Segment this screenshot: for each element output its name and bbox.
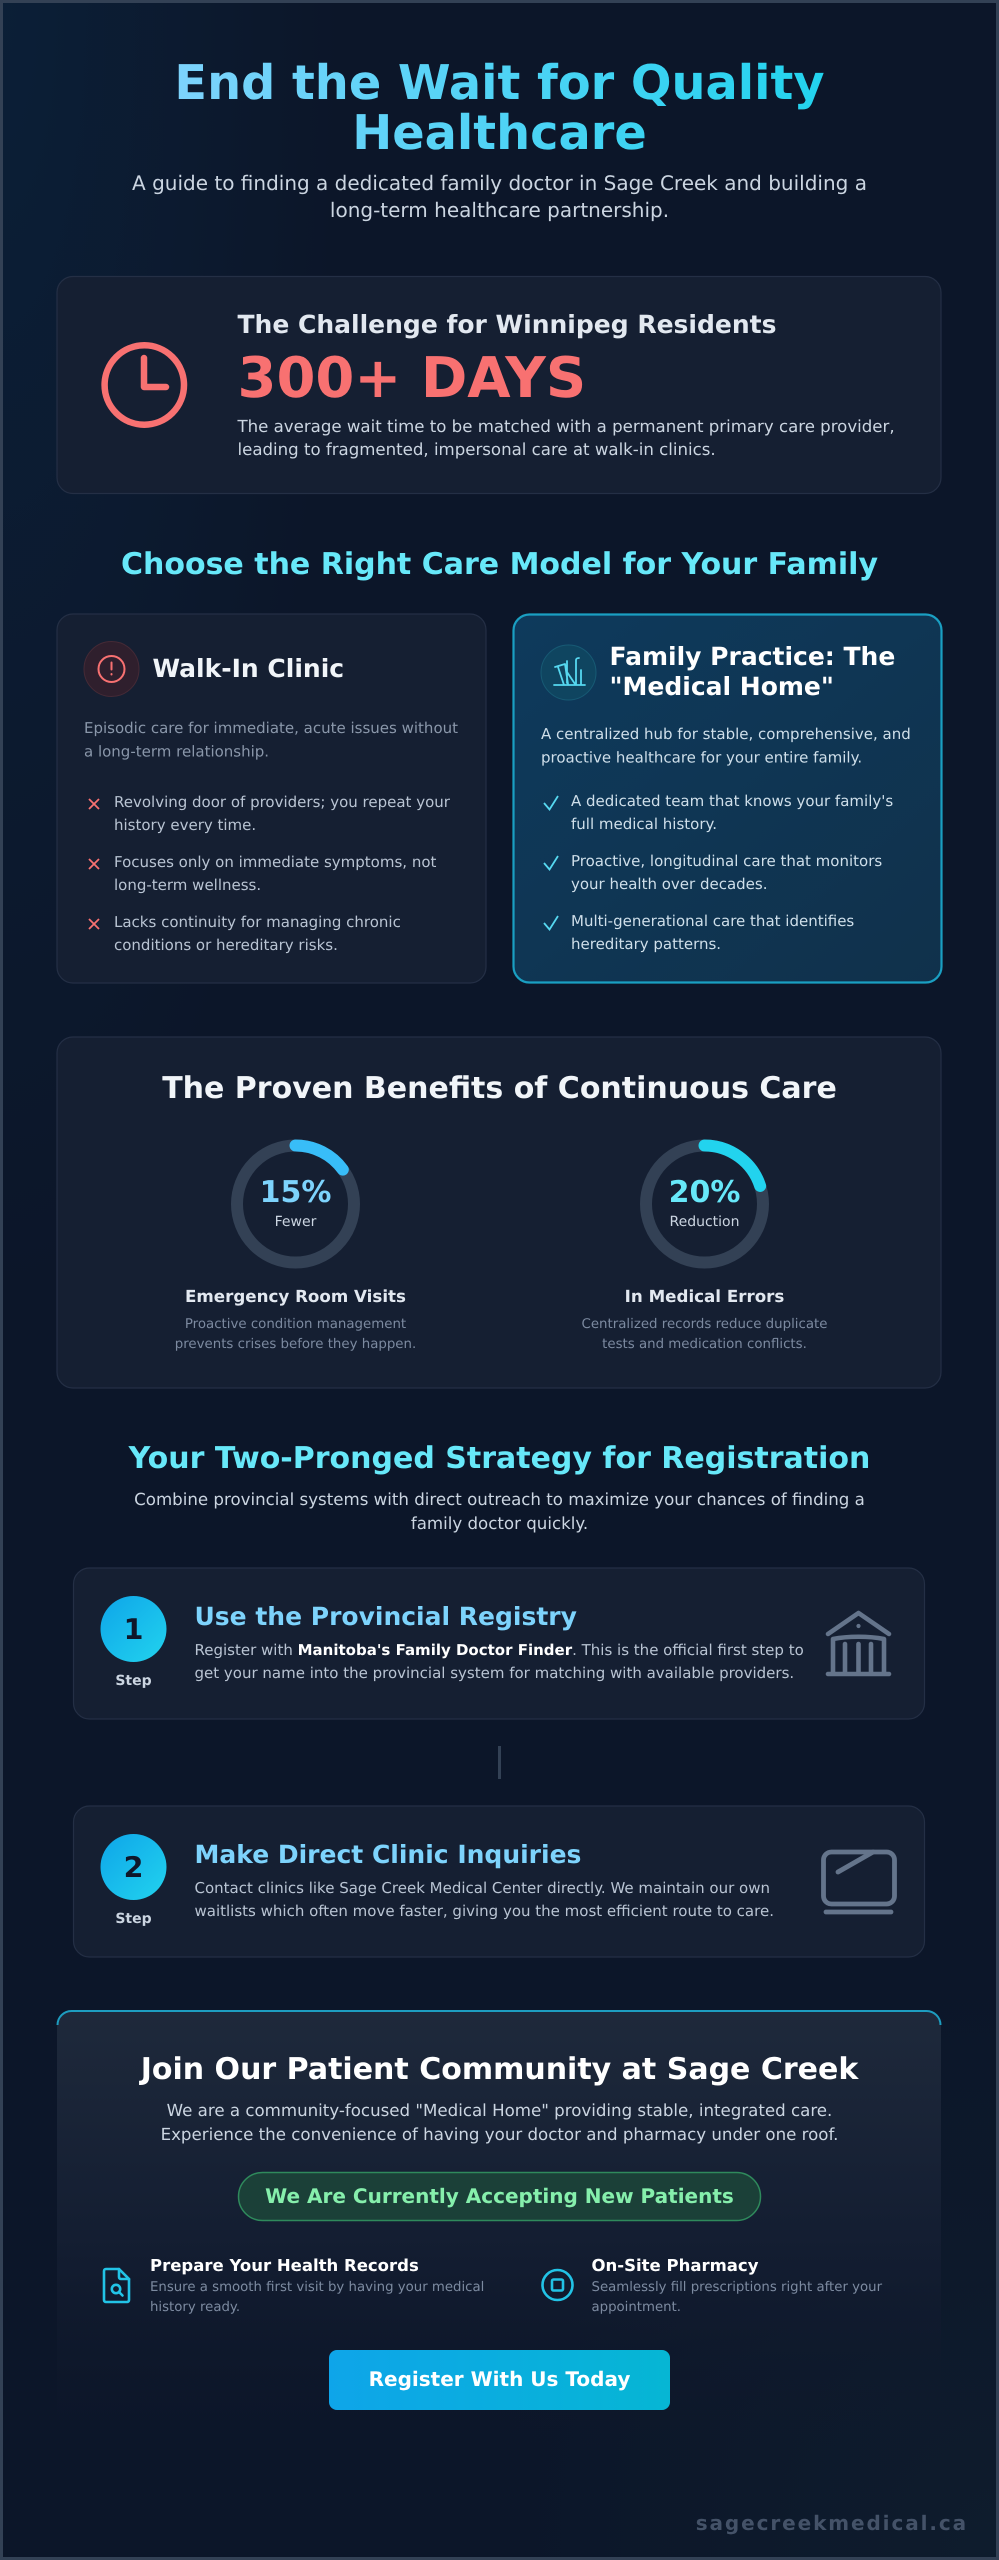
family practice benefit 3: hereditary patterns. [571,935,721,953]
walk-in description: Episodic care for immediate, acute issues without [84,719,458,737]
step 1 description: get your name into the provincial system for matching with available providers. [194,1664,794,1682]
step 1 number badge [100,1596,166,1689]
feature: on-site pharmacy: appointment. [592,2300,681,2315]
statistic: 300+ days: 300+ DAYS [238,346,586,411]
step 2 heading: Make Direct Clinic Inquiries [194,1840,581,1869]
icon: building [828,1613,889,1674]
walk-in drawback 3: Lacks continuity for managing chronic [114,913,401,931]
step 2 number badge: 2 [124,1851,143,1884]
icon: family medical home [541,645,596,700]
step 2 description: waitlists which often move faster, giving you the most efficient route to care. [194,1902,774,1920]
donut chart: 20 percent [646,1146,763,1262]
feature: on-site pharmacy: Seamlessly fill prescriptions right after your [592,2280,883,2295]
walk-in description [84,719,458,760]
stat label: emergency room visits: Emergency Room Visits [185,1286,406,1306]
stat label: emergency room visits [175,1286,416,1352]
call to action description: We are a community-focused "Medical Home" providing stable, integrated care. [167,2101,832,2120]
challenge description: The average wait time to be matched with a permanent primary care provider, [236,417,895,436]
family practice description: A centralized hub for stable, comprehensive, and [541,725,911,743]
panel: step 2 [74,1806,924,1957]
walk-in drawback 2: Focuses only on immediate symptoms, not [114,853,437,871]
family practice benefit 2: Proactive, longitudinal care that monitors [571,852,882,870]
strategy introduction: Combine provincial systems with direct outreach to maximize your chances of finding a [134,1490,865,1509]
icon: clock [105,345,184,425]
strategy introduction [134,1490,865,1533]
walk-in drawback 1: Revolving door of providers; you repeat your [114,793,451,811]
call to action description: Experience the convenience of having your doctor and pharmacy under one roof. [161,2125,838,2144]
step 2 number badge [100,1834,166,1927]
panel: walk-in clinic [57,614,486,983]
walk-in drawback 3 [89,913,401,954]
icon: pharmacy [542,2270,572,2300]
panel: step 1 [74,1568,924,1719]
family practice heading: Family Practice: The [610,642,895,671]
strategy introduction: family doctor quickly. [411,1514,588,1533]
subtitle: A guide to finding a dedicated family doctor in Sage Creek and building a [132,171,867,195]
section heading: strategy: Your Two-Pronged Strategy for Registration [128,1441,870,1476]
challenge description: leading to fragmented, impersonal care at walk-in clinics. [238,440,716,459]
benefits heading: The Proven Benefits of Continuous Care [162,1071,837,1106]
feature: prepare health records [104,2256,484,2315]
badge: accepting new patients: We Are Currently Accepting New Patients [265,2184,734,2208]
button: register: Register With Us Today [369,2367,630,2391]
icon: laptop [824,1852,894,1912]
donut chart: 15 percent: 15% [260,1175,331,1210]
donut chart: 20 percent: 20% [669,1175,740,1210]
footer url: sagecreekmedical.ca [696,2511,968,2535]
panel: proven benefits [57,1037,941,1388]
badge: accepting new patients [238,2172,760,2220]
step 1 description [194,1641,804,1682]
feature: prepare health records: history ready. [150,2300,240,2315]
icon: document search [104,2269,129,2302]
family practice benefit 1: full medical history. [571,815,717,833]
donut chart: 20 percent: Reduction [670,1214,740,1230]
donut chart: 15 percent: Fewer [275,1214,317,1230]
step 2 number badge: Step [115,1911,152,1927]
stat label: medical errors: Centralized records reduce duplicate [582,1317,827,1332]
section heading: care model: Choose the Right Care Model for Your Family [121,547,878,582]
button: register [329,2350,670,2410]
family practice benefit 3: Multi-generational care that identifies [571,912,854,930]
walk-in drawback 1 [89,793,451,834]
subtitle [132,171,867,222]
title: End the Wait for Quality [174,56,825,111]
family practice description: proactive healthcare for your entire family. [541,748,862,766]
panel: family practice [514,614,942,982]
family practice heading: "Medical Home" [610,672,834,701]
family practice benefit 2 [544,852,882,893]
stat label: medical errors: tests and medication conflicts. [602,1337,807,1352]
call to action description [161,2101,838,2144]
family practice benefit 2: your health over decades. [571,875,768,893]
title [174,56,825,161]
walk-in heading: Walk-In Clinic [152,654,344,683]
step 2 description: Contact clinics like Sage Creek Medical Center directly. We maintain our own [194,1879,770,1897]
step 1 heading: Use the Provincial Registry [194,1602,577,1631]
call to action heading: Join Our Patient Community at Sage Creek [139,2052,859,2087]
step 1 description: Register with Manitoba's Family Doctor Finder. This is the official first step to [194,1641,804,1659]
connector between steps [498,1746,501,1779]
family practice heading [610,642,895,701]
family practice benefit 1: A dedicated team that knows your family's [571,792,893,810]
stat label: emergency room visits: prevents crises before they happen. [175,1337,416,1352]
subtitle: long-term healthcare partnership. [330,198,669,222]
panel: the challenge [57,276,941,494]
family practice description [541,725,911,766]
challenge description [236,417,895,459]
donut chart: 15 percent [237,1146,354,1262]
challenge heading: The Challenge for Winnipeg Residents [238,310,776,339]
feature: on-site pharmacy [542,2256,883,2315]
walk-in drawback 3: conditions or hereditary risks. [114,936,338,954]
feature: prepare health records: Ensure a smooth first visit by having your medical [150,2280,484,2295]
walk-in drawback 2: long-term wellness. [114,876,261,894]
step 1 number badge: Step [115,1673,152,1689]
walk-in drawback 2 [89,853,437,894]
step 2 description [194,1879,774,1920]
walk-in description: a long-term relationship. [84,742,269,760]
title: Healthcare [352,106,647,161]
icon: alert [84,642,139,696]
panel: call to action [57,2011,941,2450]
family practice benefit 3 [544,912,854,953]
family practice benefit 1 [544,792,893,833]
step 1 number badge: 1 [124,1613,143,1646]
walk-in drawback 1: history every time. [114,816,256,834]
feature: on-site pharmacy: On-Site Pharmacy [592,2256,759,2275]
stat label: medical errors [582,1286,827,1352]
feature: prepare health records: Prepare Your Health Records [150,2256,419,2275]
stat label: emergency room visits: Proactive condition management [185,1317,406,1332]
stat label: medical errors: In Medical Errors [625,1286,784,1306]
